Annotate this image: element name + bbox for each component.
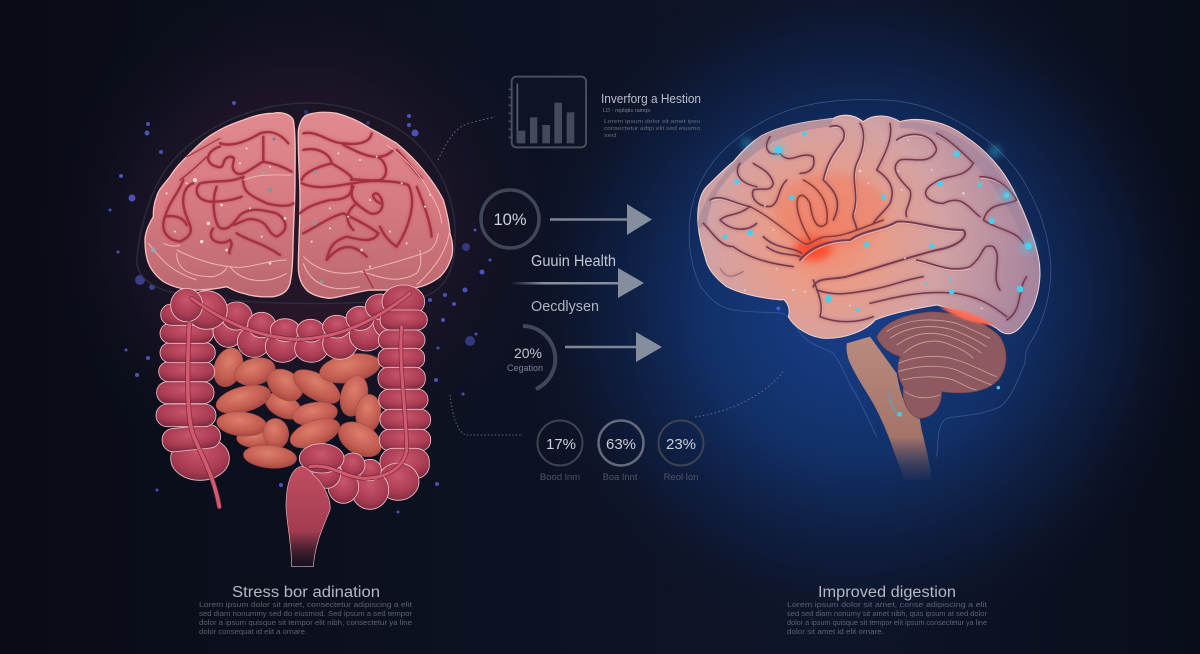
arrow: gut health (510, 268, 644, 298)
stat: 10 percent ring with arrow: 10% (493, 211, 527, 229)
caption: stress: Lorem ipsum dolor sit amet, consectetur adipiscing a elit (199, 602, 412, 609)
cerebrum (697, 115, 1040, 338)
colon band shadows (188, 293, 410, 507)
chart text block: Lorem ipsum dolor sit amet ipsu (604, 119, 700, 125)
rectum (286, 467, 330, 567)
ascending colon (156, 304, 229, 480)
sulci (703, 123, 1027, 322)
caption: stress (199, 584, 413, 636)
caption: improved digestion: dolor a ipsum quisque sit tempor elit ipsum consectetur ya line (787, 620, 987, 627)
caption: stress: dolor consequat id elit a ornare. (199, 629, 307, 636)
stat ring: 17 percent (538, 420, 582, 483)
chart text block: Inverforg a Hestion (601, 92, 701, 106)
stat ring: 17 percent: Bood lnm (540, 472, 580, 483)
dotted connector: bottom left (450, 395, 523, 435)
chart text block: sed (604, 133, 616, 139)
surface speckles (151, 137, 431, 283)
dotted connector: chart to left brain (438, 117, 495, 160)
chart text block: consectetur adipi elit sed eiusmo (604, 126, 700, 132)
caption: stress: dolor a ipsum quisque sit tempor elit nibh, consectetur ya line (199, 620, 412, 627)
caption: improved digestion (787, 584, 988, 636)
stat ring: 23 percent: 23% (666, 436, 696, 453)
cyan neural nodes (723, 132, 1035, 417)
stat: 10 percent ring with arrow (481, 190, 652, 248)
illustration: intestines (156, 285, 431, 567)
label: oecdlysen: Oecdlysen (531, 299, 599, 315)
stat: 20 percent arc with arrow (507, 326, 662, 389)
chart text block (601, 92, 701, 139)
brain halo outline (137, 103, 455, 303)
label: gut health: Guuin Health (531, 253, 616, 270)
caption: improved digestion: Lorem ipsum dolor sit amet, conse adipiscing a elit (787, 602, 987, 609)
caption: stress: Stress bor adination (232, 584, 380, 601)
lower temporal red glow (940, 307, 995, 325)
dotted connector: bottom right (695, 372, 783, 417)
descending colon (378, 310, 431, 478)
colon bands (188, 293, 410, 507)
stat ring: 23 percent: Reol lon (664, 472, 698, 483)
stat ring: 23 percent (658, 420, 704, 483)
cerebellum (877, 312, 1006, 418)
caption: stress: sed diam nonummy sed do eiusmod. Sed ipsum a sed tempor (199, 611, 413, 618)
light gyrus edges (711, 125, 1018, 318)
caption: improved digestion: sed sed diam nonumy sit amet nibh, quis ipsum at sed dolor (787, 611, 988, 618)
stat ring: 63 percent (598, 420, 644, 483)
chart text block: LD · replqtis rainqs (603, 108, 651, 114)
stat ring: 17 percent: 17% (546, 436, 576, 453)
stat ring: 63 percent: 63% (606, 436, 636, 453)
brain halo outline (689, 100, 1051, 457)
illustration: right brain side view (689, 100, 1051, 480)
brain stem (847, 337, 932, 480)
bar chart panel (508, 77, 586, 147)
stat ring: 63 percent: Boa lnnt (603, 472, 638, 483)
red hotspot glow (697, 118, 1037, 263)
caption: improved digestion: dolor sit amet id elit ornare. (787, 629, 884, 636)
small intestine loops (208, 344, 388, 470)
particles around left illustration (108, 101, 492, 514)
illustration: left brain (137, 103, 455, 303)
transverse colon upper row (171, 285, 425, 342)
transverse colon lower row (213, 305, 404, 362)
stat: 20 percent arc with arrow: 20% (514, 345, 542, 361)
left hemisphere (145, 113, 295, 297)
right hemisphere (298, 112, 453, 298)
sigmoid colon (299, 444, 419, 509)
caption: improved digestion: Improved digestion (818, 584, 956, 601)
stat: 20 percent arc with arrow: Cegation (507, 363, 543, 373)
